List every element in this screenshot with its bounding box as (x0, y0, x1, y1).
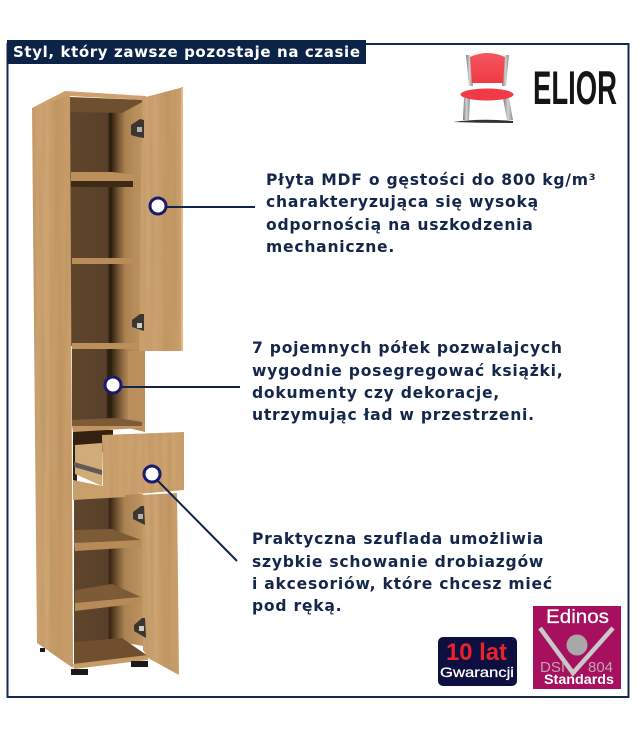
callout: drawer: i akcesoriów, które chcesz mieć (252, 575, 553, 593)
callout: drawer: szybkie schowanie drobiazgów (252, 553, 544, 571)
marker and leader: drawer (144, 466, 237, 561)
top underside (70, 97, 146, 113)
marker and leader: shelves (105, 377, 240, 393)
callout: shelves: wygodnie posegregować książki, (252, 362, 563, 380)
marker and leader: MDF board (150, 198, 255, 214)
callout: MDF board: Płyta MDF o gęstości do 800 kg/m³ (266, 171, 596, 189)
feet (71, 669, 88, 675)
callout: MDF board (266, 171, 596, 256)
callout: drawer: Praktyczna szuflada umożliwia (252, 530, 544, 548)
upper door (139, 87, 183, 351)
badge: Edinos standards (533, 606, 621, 689)
badge: 10 year warranty: 10 lat (446, 639, 507, 666)
title: Styl, który zawsze pozostaje na czasie (13, 43, 360, 61)
lower door (142, 493, 179, 675)
callout: shelves: utrzymując ład w przestrzeni. (252, 406, 535, 424)
hinges (131, 119, 146, 638)
illustration: wooden cabinet (32, 87, 184, 675)
logo: Elior chair (453, 53, 617, 123)
side panel (32, 87, 183, 675)
callout: MDF board: charakteryzująca się wysoką (266, 193, 539, 211)
callout: shelves: dokumenty czy dekoracje, (252, 384, 500, 402)
shelves (71, 172, 148, 669)
callout: drawer (252, 530, 553, 615)
badge: Edinos standards: 804 (588, 659, 613, 676)
callout: MDF board: odpornością na uszkodzenia (266, 216, 534, 234)
badge: Edinos standards: Edinos (546, 607, 609, 628)
badge: 10 year warranty: Gwarancji (440, 664, 514, 680)
callout: drawer: pod ręką. (252, 597, 342, 615)
inner side panels (112, 101, 142, 351)
callout: shelves (252, 339, 563, 424)
lower shelves (74, 529, 141, 543)
middle right panel strip (128, 351, 145, 419)
badge: Edinos standards: DSI (540, 659, 565, 676)
callout: shelves: 7 pojemnych półek pozwalajcych (252, 339, 563, 357)
callout: MDF board: mechaniczne. (266, 238, 395, 256)
open drawer (73, 432, 184, 500)
cabinet floor (74, 638, 148, 664)
top board (32, 91, 146, 108)
badge: Edinos standards: Standards (544, 671, 614, 687)
back walls (70, 100, 125, 346)
badge: 10 year warranty (438, 637, 517, 686)
